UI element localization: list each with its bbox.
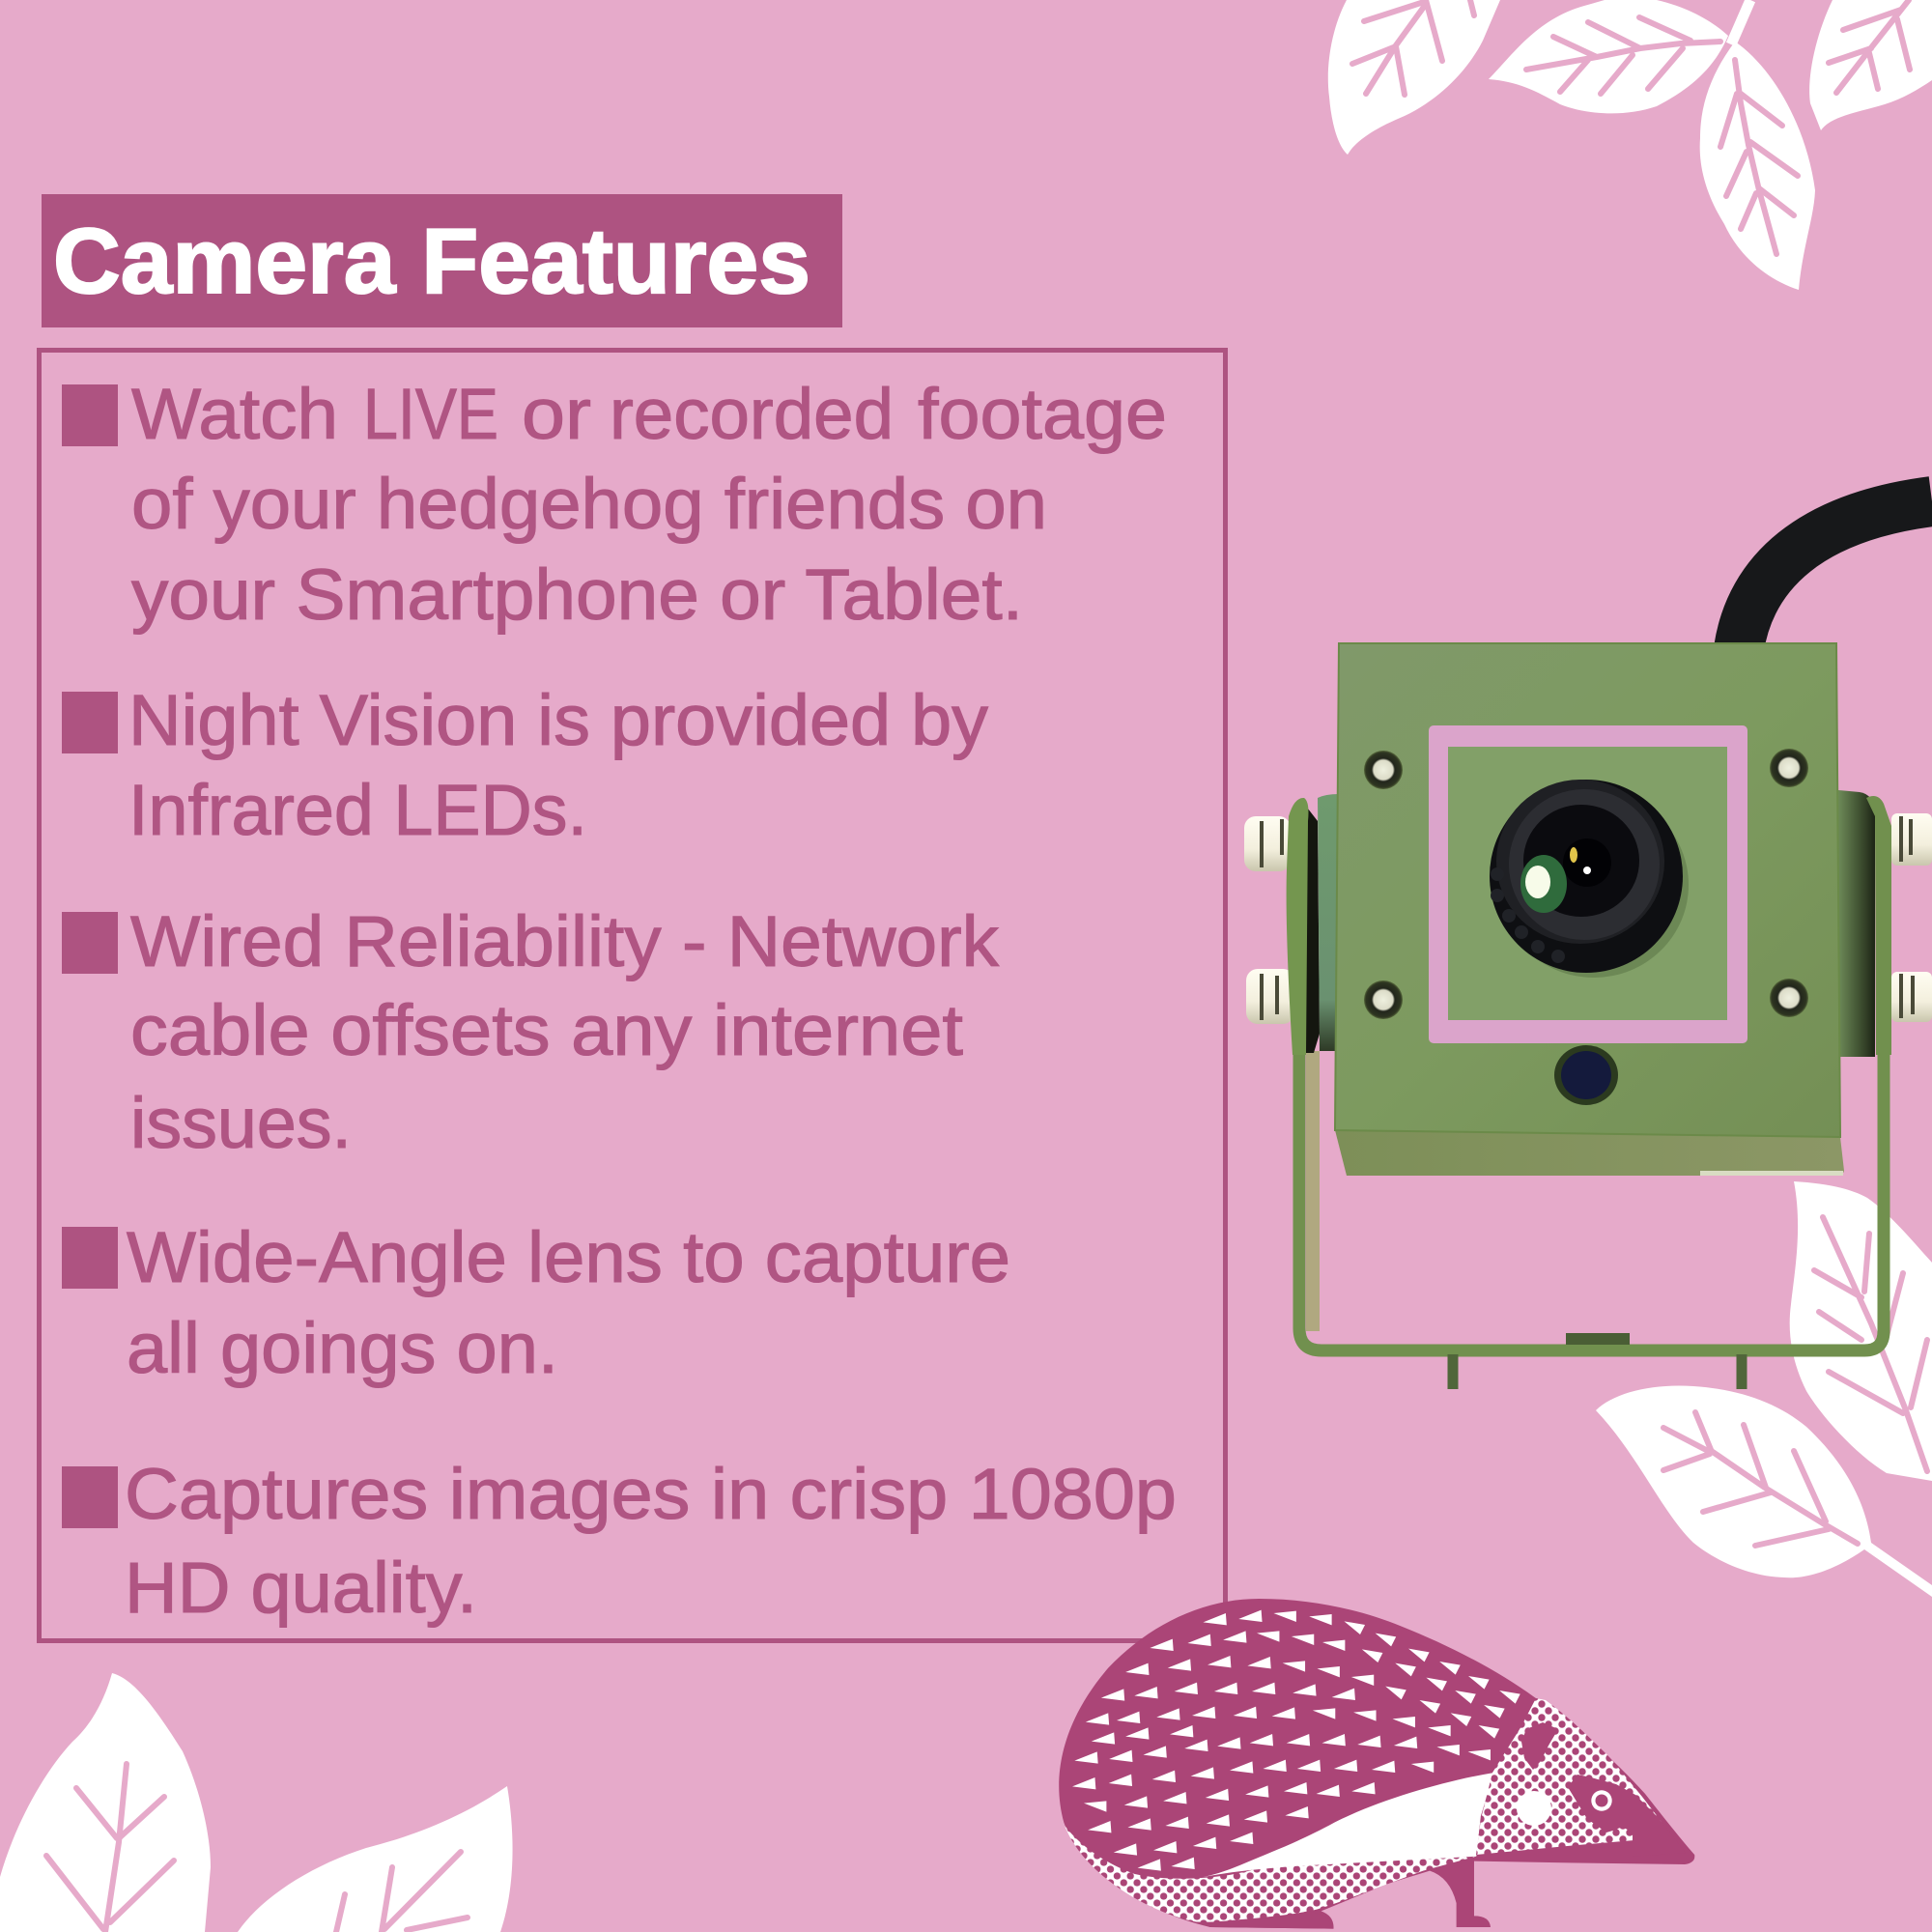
feature: live footage: or [522,374,591,454]
feature: live footage: footage [918,374,1167,454]
leaf: right of camera vertical [1790,1181,1932,1481]
title: Camera Features: Camera Features [53,210,810,313]
bracket [1299,1048,1884,1389]
feature: night vision: Night Vision is provided by [128,680,988,760]
cable [1739,501,1932,649]
panel: feature list box [39,350,1225,1640]
camera photo [1244,501,1932,1389]
lens [1490,780,1689,978]
body lower side [1335,1130,1844,1176]
feature: wired reliability: Wired Reliability - Network [130,901,1000,981]
infrared LED [1554,1045,1618,1105]
feature: night vision [62,680,988,850]
feature: wired reliability [62,901,1000,1163]
body silhouette [1059,1599,1694,1929]
left bracket plate [1287,794,1339,1055]
leaf: right lower horizontal [1596,1385,1932,1597]
feature: 1080p HD: HD quality. [125,1548,477,1628]
body front [1335,643,1840,1137]
body and spines [1059,1599,1694,1929]
halftone under body [1065,1826,1476,1923]
feature: live footage: of your hedgehog friends on [131,464,1047,544]
feature: live footage: Watch [131,374,338,454]
cheek [1517,1791,1551,1826]
hedgehog illustration [1059,1599,1694,1929]
screws [1364,749,1808,1019]
leaf: bottom left small [238,1786,513,1932]
feature: wide-angle lens [62,1217,1010,1388]
white belly [1195,1773,1494,1879]
leaf: bottom left large [0,1673,211,1932]
feature: 1080p HD: Captures images in crisp 1080p [125,1454,1177,1534]
spines [1072,1610,1520,1871]
bracket mounting nuts [1244,813,1932,1024]
feature: night vision: Infrared LEDs. [128,770,587,850]
feature: 1080p HD [62,1454,1177,1628]
feature: live footage: LIVE [363,374,498,454]
feature: live footage: recorded [610,374,894,454]
leaf: top left of branch [1328,0,1500,155]
leaf: top centre horizontal [1489,0,1728,113]
eye [1591,1790,1612,1811]
snout [1568,1775,1686,1857]
back foot [1192,1911,1333,1929]
feature: wired reliability: cable offsets any internet [130,990,963,1070]
leaf stem: top [1731,0,1750,44]
leaf: top hanging [1700,42,1815,290]
feature: live footage [62,374,1167,635]
feature: wide-angle lens: Wide-Angle lens to capture [127,1217,1010,1297]
feature: wide-angle lens: all goings on. [127,1308,558,1388]
ear [1521,1722,1558,1770]
pink frame [1429,725,1747,1043]
leaf: top right [1809,0,1932,130]
right bracket plate [1838,790,1891,1057]
halftone head [1476,1698,1662,1855]
feature: wired reliability: issues. [130,1083,352,1163]
feature: live footage: your Smartphone or Tablet. [131,554,1023,635]
